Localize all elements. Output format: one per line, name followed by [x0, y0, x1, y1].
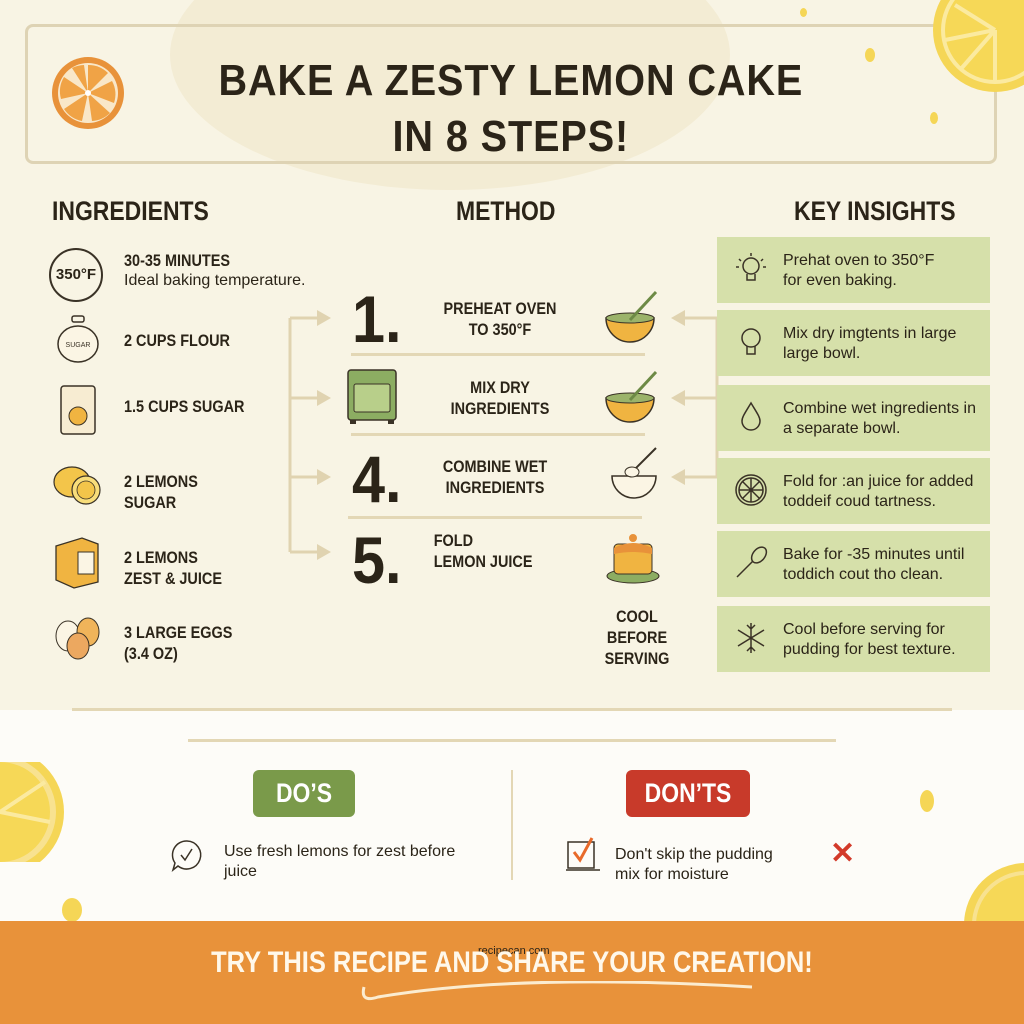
icon: lemon left — [0, 762, 64, 862]
text: FOLD — [434, 531, 473, 550]
insight 4 — [717, 458, 990, 524]
heading: key insights: KEY INSIGHTS — [794, 196, 956, 226]
insight 6: Cool before serving for — [783, 621, 945, 638]
icon: cake — [606, 534, 660, 584]
heading: ingredients: INGREDIENTS — [52, 196, 209, 226]
title: BAKE A ZESTY LEMON CAKE — [219, 56, 803, 105]
insight 6 — [717, 606, 990, 672]
insight 4: Fold for :an juice for added — [783, 473, 973, 490]
icon: jar: SUGAR — [66, 342, 90, 349]
text: TO 350°F — [469, 320, 531, 339]
text: SERVING — [605, 649, 669, 668]
insight 1: for even baking. — [783, 272, 897, 289]
panel: dos: juice — [224, 863, 257, 880]
icon: sugar bag — [60, 385, 96, 435]
text: BEFORE — [607, 628, 667, 647]
insight 6: pudding for best texture. — [783, 641, 956, 658]
insight 3 — [717, 385, 990, 451]
badge: don'ts: DON’TS — [645, 778, 731, 808]
text: COMBINE WET — [443, 457, 547, 476]
text: (3.4 OZ) — [124, 644, 178, 663]
insight 1 — [717, 237, 990, 303]
panel: donts: Don't skip the pudding — [615, 846, 773, 863]
icon: jar — [57, 315, 99, 363]
icon: checklist — [566, 837, 600, 871]
insight 2 — [717, 310, 990, 376]
icon: eggs — [56, 618, 100, 660]
icon: lemon right — [964, 863, 1024, 921]
icon: lemons — [53, 466, 101, 505]
title: IN 8 STEPS! — [393, 112, 629, 161]
text: MIX DRY — [470, 378, 530, 397]
text: COOL — [616, 607, 658, 626]
text: 3 LARGE EGGS — [124, 623, 232, 642]
panel: dos — [172, 770, 455, 880]
icon: 350F badge: 350°F — [56, 266, 96, 283]
icon: 350F badge — [49, 248, 103, 302]
text: 2 LEMONS — [124, 472, 198, 491]
text: LEMON JUICE — [434, 552, 532, 571]
step 5: 5. — [352, 523, 402, 597]
text: ZEST & JUICE — [124, 569, 222, 588]
bottom white section — [0, 710, 1024, 922]
text: 2 LEMONS — [124, 548, 198, 567]
text: 30-35 MINUTES — [124, 251, 230, 270]
insight 2: Mix dry imgtents in large — [783, 325, 956, 342]
heading: method: METHOD — [456, 196, 555, 226]
footer banner — [0, 921, 1024, 1024]
arrows: left connector — [288, 310, 718, 560]
insight 2: large bowl. — [783, 345, 860, 362]
step 4: 4. — [352, 442, 402, 516]
text: PREHEAT OVEN — [444, 299, 556, 318]
icon: check bubble — [172, 840, 202, 872]
insight 5: Bake for -35 minutes until — [783, 546, 964, 563]
insight 3: a separate bowl. — [783, 420, 900, 437]
insight 5 — [717, 531, 990, 597]
title — [219, 56, 803, 161]
text: 2 CUPS FLOUR — [124, 331, 230, 350]
panel: donts: mix for moisture — [615, 866, 729, 883]
panel: donts — [566, 770, 855, 883]
title panel — [25, 24, 997, 164]
badge: don'ts — [626, 770, 750, 817]
icon: lemon slice top right — [933, 0, 1024, 92]
icon: oven — [347, 369, 397, 424]
text: INGREDIENTS — [451, 399, 549, 418]
panel: method — [288, 310, 718, 560]
panel: key insights — [717, 237, 990, 672]
insight 1: Prehat oven to 350°F — [783, 252, 934, 269]
insight 4: toddeif coud tartness. — [783, 493, 936, 510]
text: SUGAR — [124, 493, 176, 512]
insight 3: Combine wet ingredients in — [783, 400, 976, 417]
icon: box — [55, 537, 99, 589]
insight 5: toddich cout tho clean. — [783, 566, 943, 583]
icons: bowls — [605, 291, 657, 343]
background blob — [170, 0, 730, 190]
text: INGREDIENTS — [446, 478, 544, 497]
panel: dos: Use fresh lemons for zest before — [224, 843, 455, 860]
footer banner: recipecan.com — [478, 945, 550, 957]
icon: red x: ✕ — [830, 837, 855, 870]
icon: orange slice — [52, 57, 124, 129]
text: Ideal baking temperature. — [124, 272, 305, 289]
text: 1.5 CUPS SUGAR — [124, 397, 244, 416]
badge: do's: DO’S — [276, 778, 332, 808]
badge: do's — [253, 770, 355, 817]
step 1: 1. — [352, 282, 402, 356]
footer text: TRY THIS RECIPE AND SHARE YOUR CREATION! — [211, 946, 813, 979]
